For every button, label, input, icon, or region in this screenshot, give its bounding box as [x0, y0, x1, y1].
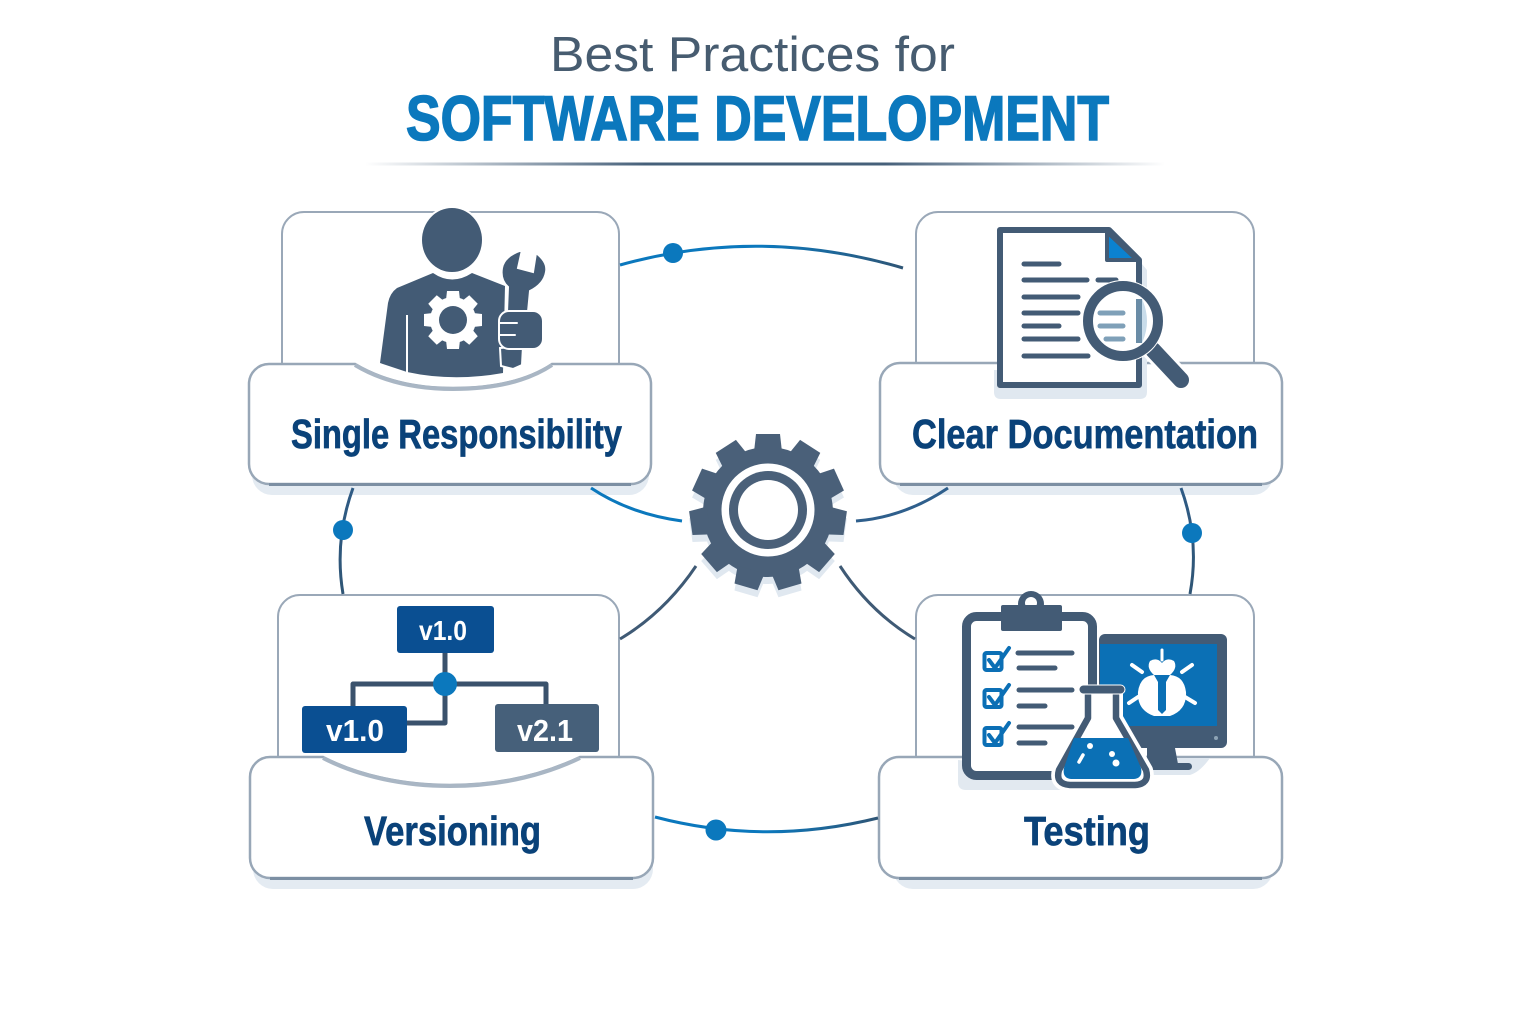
- icon: clipboard checklist: [958, 591, 1092, 790]
- label card: testing: [879, 757, 1282, 878]
- version box: left v1.0: [302, 706, 407, 753]
- panel: clear documentation: [880, 212, 1282, 495]
- panel: testing: [879, 591, 1282, 889]
- icon: bug: [1129, 650, 1195, 716]
- version box: left v1.0: v1.0: [326, 713, 384, 748]
- version box: right v2.1: v2.1: [517, 713, 573, 748]
- connector dots: [333, 243, 1202, 840]
- connector: bottom arc: [655, 817, 878, 832]
- label card: versioning: [250, 757, 653, 878]
- panel: versioning: [250, 595, 653, 889]
- icon: monitor with bug: [1099, 634, 1227, 775]
- title: SOFTWARE DEVELOPMENT: SOFTWARE DEVELOPMENT: [406, 84, 1109, 154]
- central gear icon: [689, 434, 847, 598]
- version box: top v1.0: v1.0: [419, 615, 467, 646]
- icon: document with magnifier: [994, 230, 1181, 399]
- connectors between cards: [340, 246, 1193, 832]
- title: Best Practices for: Best Practices for: [550, 28, 955, 82]
- version box: top v1.0: [397, 606, 494, 653]
- connector: gear to clear documentation: [856, 488, 948, 521]
- label: clear documentation: Clear Documentation: [912, 411, 1258, 457]
- connector: gear to versioning: [620, 566, 696, 639]
- label card: clear documentation: [880, 363, 1282, 484]
- icon: person with wrench: [380, 206, 546, 377]
- icon: flask: [1058, 685, 1147, 785]
- version box: right v2.1: [495, 704, 599, 752]
- connector: left arc: [340, 488, 353, 594]
- connector: top arc: [620, 246, 903, 268]
- label: single responsibility: Single Responsibility: [291, 411, 622, 457]
- label: testing: Testing: [1024, 808, 1150, 854]
- label card: single responsibility: [249, 364, 651, 484]
- diagram: version tree: [302, 606, 599, 753]
- panel: single responsibility: [249, 206, 651, 495]
- icon: chest gear: [424, 291, 482, 349]
- connector: gear to single responsibility: [591, 488, 682, 521]
- connector: right arc: [1181, 488, 1193, 594]
- connector: gear to testing: [840, 566, 915, 639]
- label: versioning: Versioning: [364, 808, 541, 854]
